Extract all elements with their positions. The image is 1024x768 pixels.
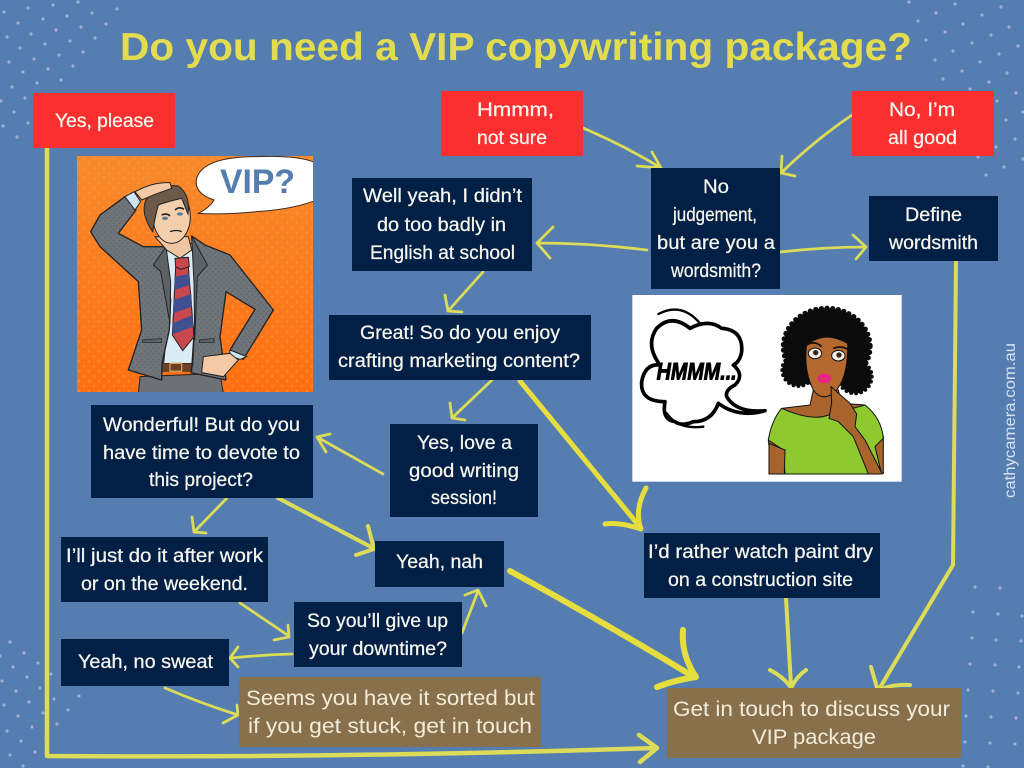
arrow: Hmmm to No judgement: [583, 128, 661, 168]
arrow: Define to Get in touch: [871, 262, 956, 691]
box: I'll just do it after work: I’ll just do it after work: [66, 546, 264, 567]
arrow: Yeah no sweat to Seems: [165, 688, 238, 723]
box: No, I'm all good: No, I’m: [889, 100, 955, 121]
website credit: cathycamera.com.au: [1002, 343, 1019, 498]
box: Wonderful question: Wonderful! But do you: [103, 415, 300, 436]
outcome: Seems you have it sorted: Seems you have it sorted but: [246, 687, 535, 710]
box: So you'll give up your downtime: So you’ll give up: [307, 611, 448, 632]
box: So you'll give up your downtime: [294, 602, 462, 667]
box: So you'll give up your downtime: your downtime?: [309, 639, 447, 660]
arrow: Wonderful to I'll: [192, 498, 227, 533]
box: Yes, love a good writing session: Yes, love a: [417, 433, 512, 454]
box: Hmmm, not sure: Hmmm,: [477, 100, 554, 121]
arrow: Yeah nah to Get in touch: [510, 571, 696, 687]
box: Yes, love a good writing session: good writing: [409, 461, 519, 482]
box: No judgement question: wordsmith?: [670, 261, 761, 282]
box: Wonderful question: have time to devote to: [103, 443, 300, 464]
arrow: Wonderful to Yeah nah: [278, 498, 374, 555]
box: I'd rather watch paint dry: I’d rather watch paint dry: [648, 542, 874, 563]
title: Do you need a VIP copywriting package?: [120, 26, 912, 69]
box: No judgement question: but are you a: [657, 233, 775, 254]
box: No judgement question: [651, 168, 780, 289]
box: Yeah, nah: [375, 541, 504, 587]
illustration: thinking woman with HMMM bubble: HMMM...: [657, 358, 737, 385]
box: Hmmm, not sure: [441, 91, 583, 156]
box: Well yeah: do too badly in: [377, 215, 506, 236]
box: Yes, please: [33, 93, 175, 148]
box: I'd rather watch paint dry: on a construction site: [668, 570, 853, 591]
box: Great question: [329, 315, 591, 380]
box: Well yeah: English at school: [370, 243, 515, 264]
box: Yeah, no sweat: [61, 639, 229, 686]
illustration: thinking woman with HMMM bubble: [632, 295, 902, 482]
box: Well yeah: Well yeah, I didn’t: [363, 186, 523, 207]
box: Yeah, no sweat: Yeah, no sweat: [78, 652, 214, 673]
arrow: So you'll to Yeah nah: [462, 590, 486, 633]
arrow: No to No judgement: [781, 115, 852, 176]
box: Yes, love a good writing session: session!: [431, 488, 497, 509]
box: Define wordsmith: [869, 196, 998, 261]
box: Yes, love a good writing session: [390, 424, 538, 517]
box: Wonderful question: this project?: [149, 470, 253, 491]
arrow: Yes please to Get in touch: [47, 148, 657, 762]
box: I'll just do it after work: or on the weekend.: [81, 574, 248, 595]
arrow: I'd rather to Get in touch: [770, 598, 806, 688]
arrow: I'll to So you'll: [240, 603, 289, 640]
outcome: Get in touch: [667, 688, 961, 758]
arrow: wordsmith question to Define: [780, 235, 866, 259]
arrow: wordsmith question to Well yeah: [537, 227, 647, 258]
box: Wonderful question: [91, 405, 313, 498]
box: Hmmm, not sure: not sure: [477, 128, 547, 149]
box: No, I'm all good: [852, 91, 994, 156]
arrow: Great to Yes love: [450, 380, 492, 420]
outcome: Get in touch: VIP package: [752, 726, 876, 749]
outcome: Get in touch: Get in touch to discuss your: [673, 698, 950, 721]
box: No judgement question: No: [703, 177, 729, 198]
arrow: Yes love to Wonderful: [317, 434, 383, 474]
box: Define wordsmith: Define: [905, 205, 962, 226]
arrow: Well yeah to Great: [445, 272, 483, 312]
box: Yes, please: Yes, please: [55, 111, 154, 132]
box: Great question: crafting marketing content?: [338, 351, 580, 372]
illustration: puzzled businessman with VIP speech bubble: VIP?: [220, 163, 295, 201]
box: Define wordsmith: wordsmith: [888, 233, 978, 254]
box: I'd rather watch paint dry: [644, 533, 880, 598]
arrow: So you'll to Yeah no sweat: [230, 647, 292, 667]
outcome: Seems you have it sorted: [239, 677, 541, 747]
box: Well yeah: [352, 178, 532, 271]
box: No judgement question: judgement,: [672, 205, 757, 226]
box: I'll just do it after work: [61, 537, 268, 602]
illustration: puzzled businessman with VIP speech bubble: [77, 156, 317, 393]
outcome: Seems you have it sorted: if you get stuck, get in touch: [248, 715, 532, 738]
box: Yeah, nah: Yeah, nah: [396, 552, 483, 573]
box: No, I'm all good: all good: [888, 128, 957, 149]
arrow: Great to I'd rather: [520, 381, 646, 529]
box: Great question: Great! So do you enjoy: [360, 323, 561, 344]
